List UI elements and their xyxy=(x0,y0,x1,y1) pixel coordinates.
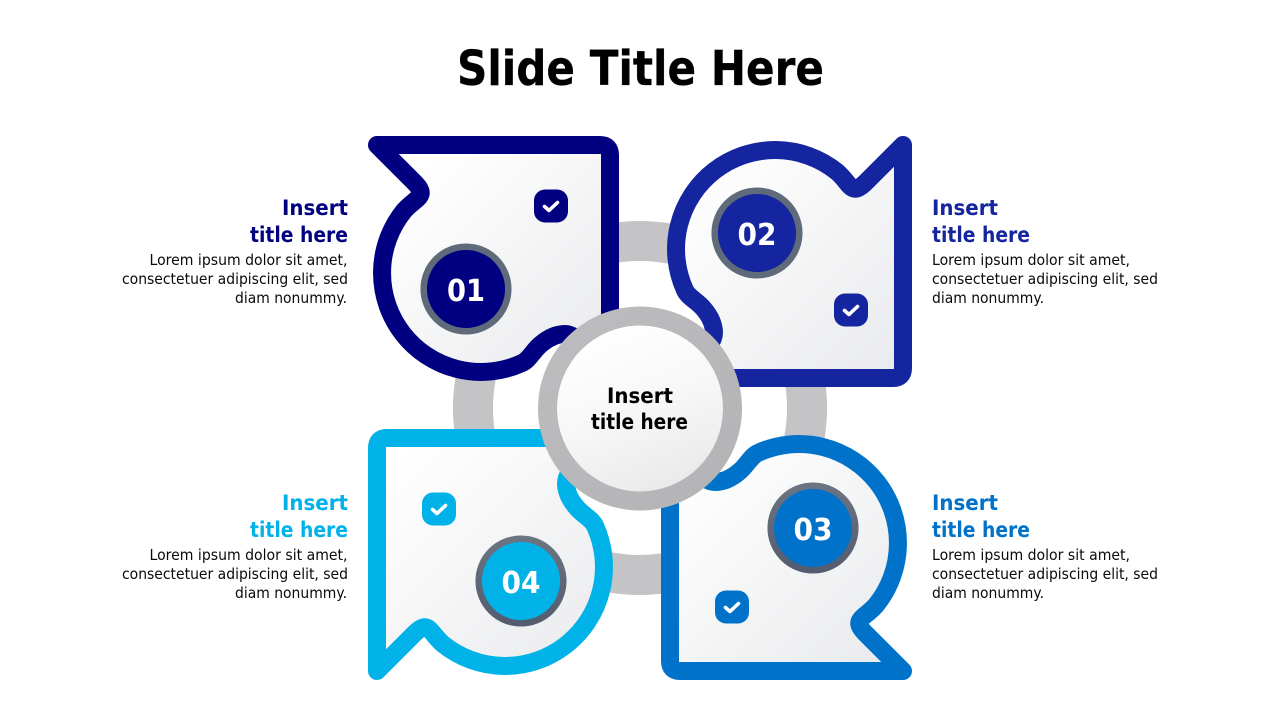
shape: step 01 outline xyxy=(377,145,610,372)
text block: step 02: Lorem ipsum dolor sit amet, xyxy=(932,251,1130,269)
panel: step 03 xyxy=(670,444,903,671)
number badge 01 xyxy=(424,247,508,331)
text block: step 02: title here xyxy=(932,223,1030,247)
background ring xyxy=(473,241,807,575)
text block: step 02: Insert xyxy=(932,196,998,220)
title: Slide Title Here xyxy=(457,41,824,97)
text block: step 04: Insert xyxy=(282,491,348,515)
text block: step 03 xyxy=(932,491,1158,602)
center hub label xyxy=(591,384,688,434)
panel: step 04 xyxy=(377,438,604,671)
text block: step 04 xyxy=(122,491,348,602)
icon: check 03 xyxy=(715,590,749,624)
text block: step 03: Lorem ipsum dolor sit amet, xyxy=(932,546,1130,564)
icon: check 02 xyxy=(834,294,868,326)
text block: step 01: consectetuer adipiscing elit, sed xyxy=(122,270,348,288)
panel: step 02 xyxy=(676,145,903,378)
text block: step 02: diam nonummy. xyxy=(932,289,1044,307)
number badge 03: 03 xyxy=(794,513,832,548)
text block: step 03: Insert xyxy=(932,491,998,515)
text block: step 01: Lorem ipsum dolor sit amet, xyxy=(150,251,348,269)
text block: step 04: Lorem ipsum dolor sit amet, xyxy=(150,546,348,564)
shape: step 03 outline xyxy=(670,444,903,671)
number badge 04 xyxy=(479,539,563,623)
center hub xyxy=(538,306,742,510)
text block: step 02 xyxy=(932,196,1158,307)
text block: step 03: consectetuer adipiscing elit, sed xyxy=(932,565,1158,583)
number badge 02: 02 xyxy=(738,218,776,253)
center hub label: Insert xyxy=(607,384,673,408)
text block: step 01: diam nonummy. xyxy=(235,289,347,307)
text block: step 01: title here xyxy=(250,223,348,247)
text block: step 04: diam nonummy. xyxy=(235,584,347,602)
number badge 03 xyxy=(771,486,855,570)
text block: step 03: title here xyxy=(932,518,1030,542)
shape: step 02 outline xyxy=(676,145,903,378)
shape: step 04 outline xyxy=(377,438,604,671)
number badge 04: 04 xyxy=(502,566,540,601)
text block: step 01 xyxy=(122,196,348,307)
icon: check 01 xyxy=(534,190,568,222)
number badge 01: 01 xyxy=(447,274,485,309)
icon: check 04 xyxy=(422,492,456,526)
panel: step 01 xyxy=(377,145,610,372)
text block: step 02: consectetuer adipiscing elit, sed xyxy=(932,270,1158,288)
text block: step 04: consectetuer adipiscing elit, sed xyxy=(122,565,348,583)
text block: step 01: Insert xyxy=(282,196,348,220)
text block: step 04: title here xyxy=(250,518,348,542)
number badge 02 xyxy=(715,191,799,275)
center hub label: title here xyxy=(591,410,688,434)
text block: step 03: diam nonummy. xyxy=(932,584,1044,602)
